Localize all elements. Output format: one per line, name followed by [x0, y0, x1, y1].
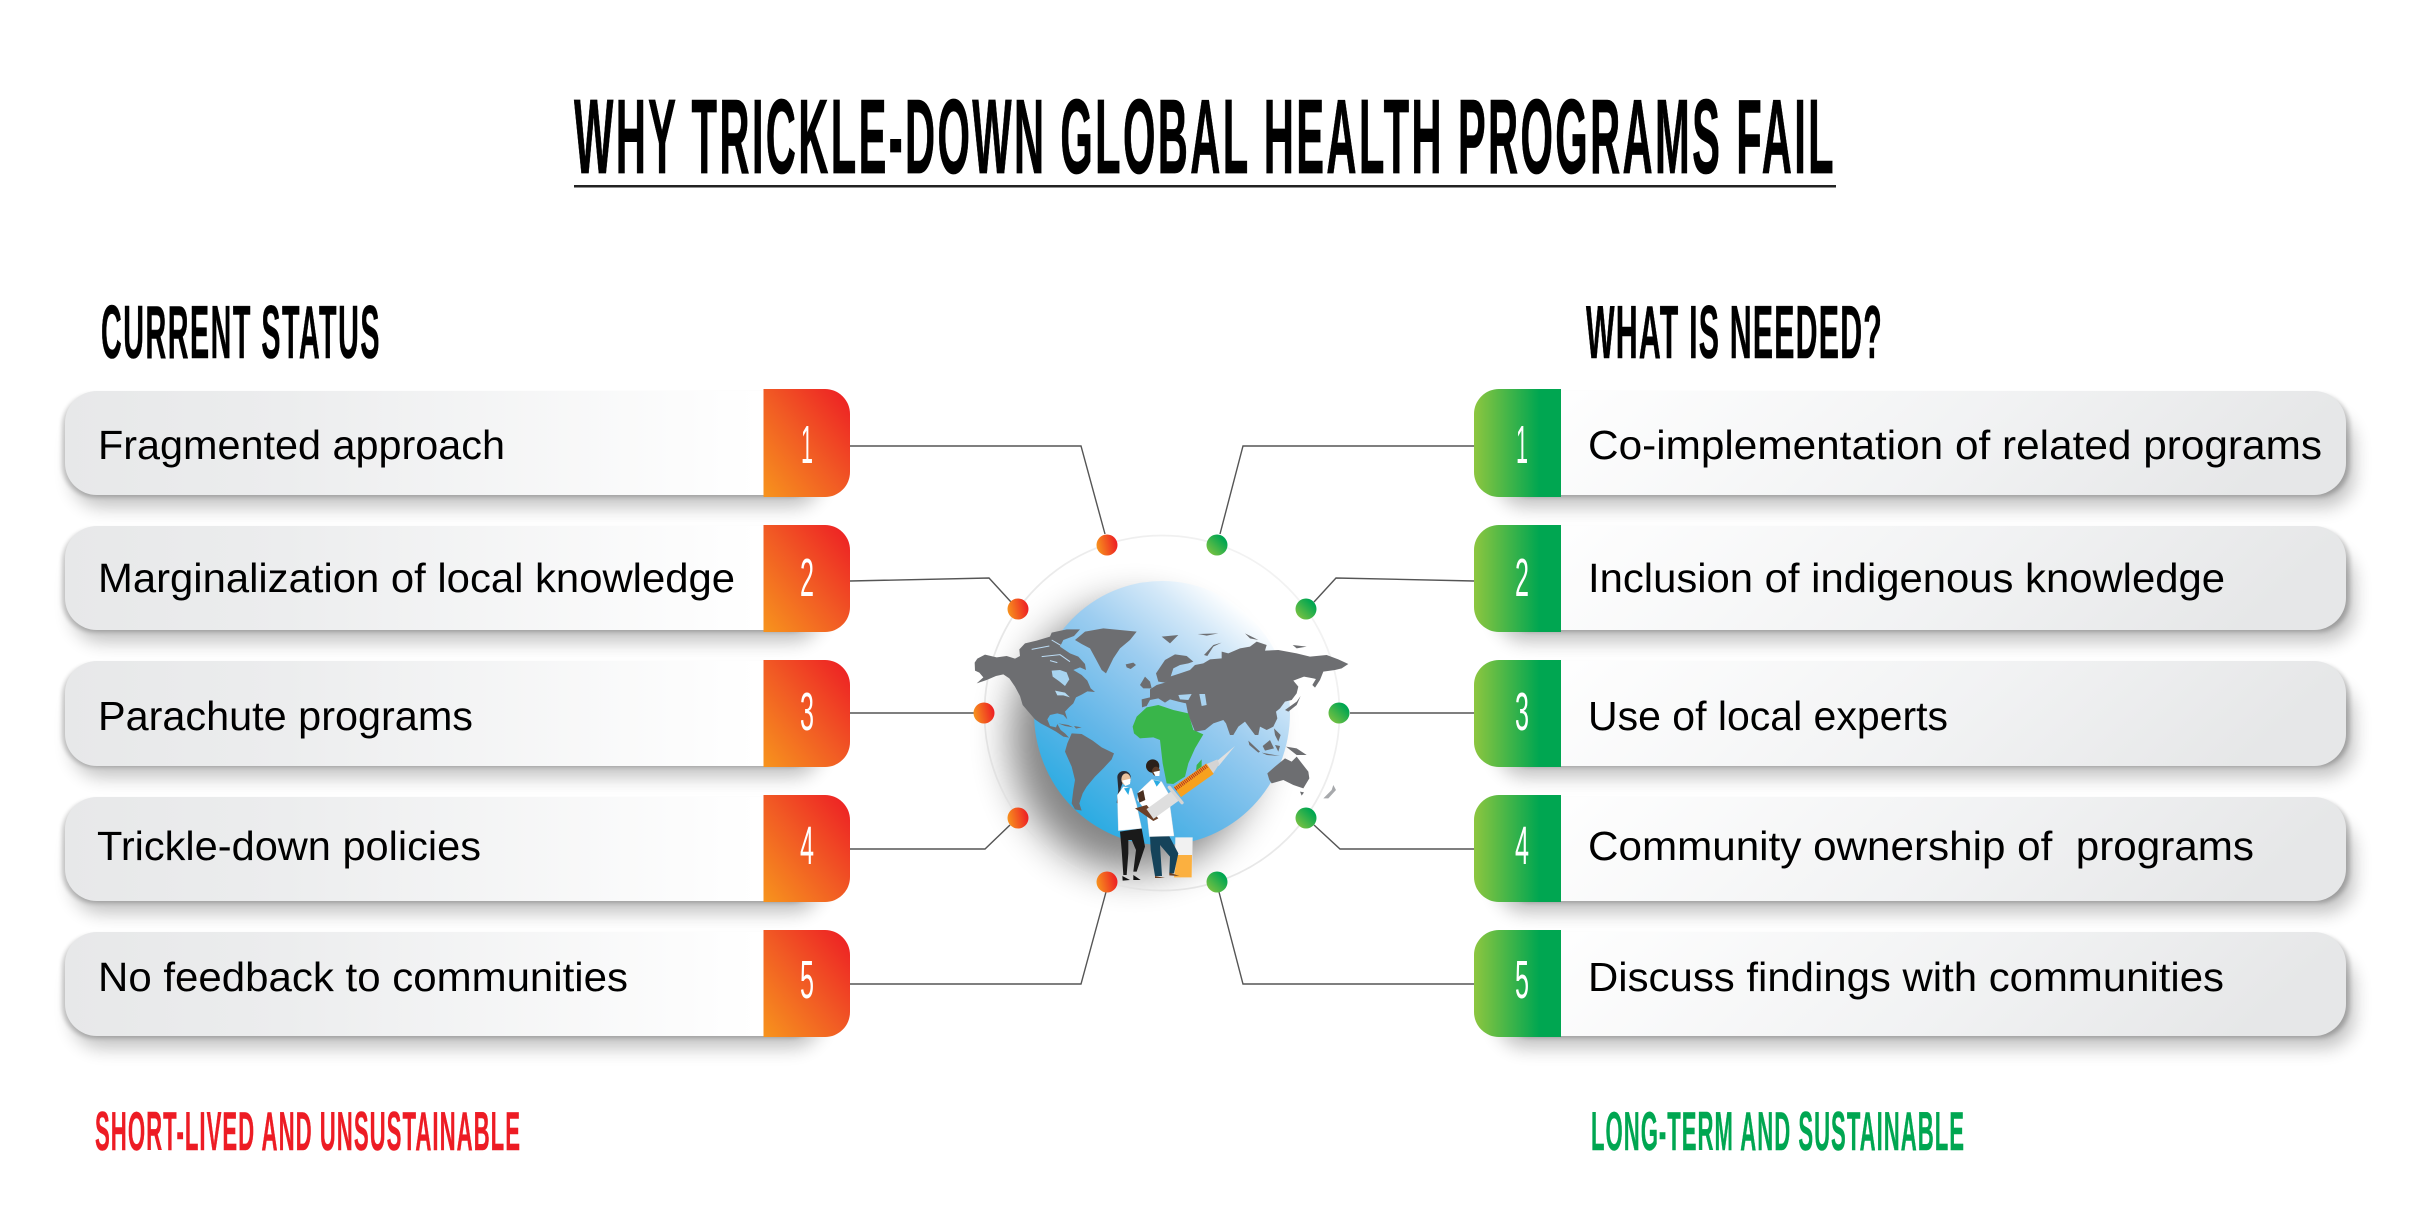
item 5: no feedback: 5 — [800, 950, 814, 1010]
world map west — [975, 628, 1152, 811]
item 3: use of local experts: 3 — [1515, 682, 1529, 742]
central graphic: globe — [974, 534, 1350, 892]
panel: current status — [62, 290, 850, 1162]
item 4: trickle-down policies: Trickle-down policies — [97, 823, 481, 869]
item 2: marginalization — [62, 525, 850, 642]
item 2: inclusion of indigenous knowledge: Inclusion of indigenous knowledge — [1588, 555, 2225, 601]
nodes: right (green) — [1206, 534, 1350, 892]
item 4: trickle-down policies: 4 — [800, 816, 814, 876]
item 2: inclusion of indigenous knowledge — [1474, 525, 2354, 642]
item 5: discuss findings — [1474, 930, 2354, 1048]
africa — [1133, 705, 1203, 784]
nodes: left (orange) — [974, 534, 1118, 892]
item 3: parachute programs: Parachute programs — [98, 693, 473, 739]
item 5: discuss findings: 5 — [1515, 950, 1529, 1010]
panel: current status: SHORT-LIVED AND UNSUSTAINABLE — [95, 1100, 521, 1162]
globe shadow — [1011, 604, 1259, 872]
item 4: community ownership: Community ownership of programs — [1588, 823, 2254, 869]
item 4: trickle-down policies — [62, 795, 850, 913]
panel: what is needed: WHAT IS NEEDED? — [1586, 290, 1883, 374]
item 1: co-implementation — [1474, 389, 2354, 507]
item 3: use of local experts — [1474, 660, 2354, 777]
item 5: no feedback — [62, 930, 850, 1048]
item 4: community ownership — [1474, 795, 2354, 913]
globe sphere — [1034, 581, 1290, 845]
item 5: discuss findings: Discuss findings with communities — [1588, 954, 2224, 1000]
left scientist — [1117, 771, 1145, 881]
item 2: marginalization: Marginalization of local knowledge — [98, 555, 735, 601]
item 4: community ownership: 4 — [1515, 816, 1529, 876]
item 3: parachute programs — [62, 660, 850, 777]
right scientist — [1135, 759, 1179, 878]
item 1: fragmented approach: Fragmented approach — [98, 422, 505, 468]
item 1: co-implementation: 1 — [1516, 415, 1528, 475]
item 3: parachute programs: 3 — [800, 682, 814, 742]
item 3: use of local experts: Use of local experts — [1588, 693, 1948, 739]
ring — [984, 536, 1340, 890]
item 1: fragmented approach: 1 — [801, 415, 813, 475]
panel: what is needed — [1474, 290, 2354, 1162]
world map east — [1142, 633, 1348, 798]
item 1: fragmented approach — [62, 389, 850, 507]
item 1: co-implementation: Co-implementation of related programs — [1588, 422, 2322, 468]
panel: current status: CURRENT STATUS — [101, 290, 381, 374]
item 5: no feedback: No feedback to communities — [98, 954, 628, 1000]
scientists and syringe — [1117, 746, 1235, 881]
connector lines — [850, 446, 1474, 984]
item 2: marginalization: 2 — [800, 548, 814, 608]
item 2: inclusion of indigenous knowledge: 2 — [1515, 548, 1529, 608]
syringe — [1150, 746, 1235, 814]
test tube — [1174, 837, 1193, 877]
